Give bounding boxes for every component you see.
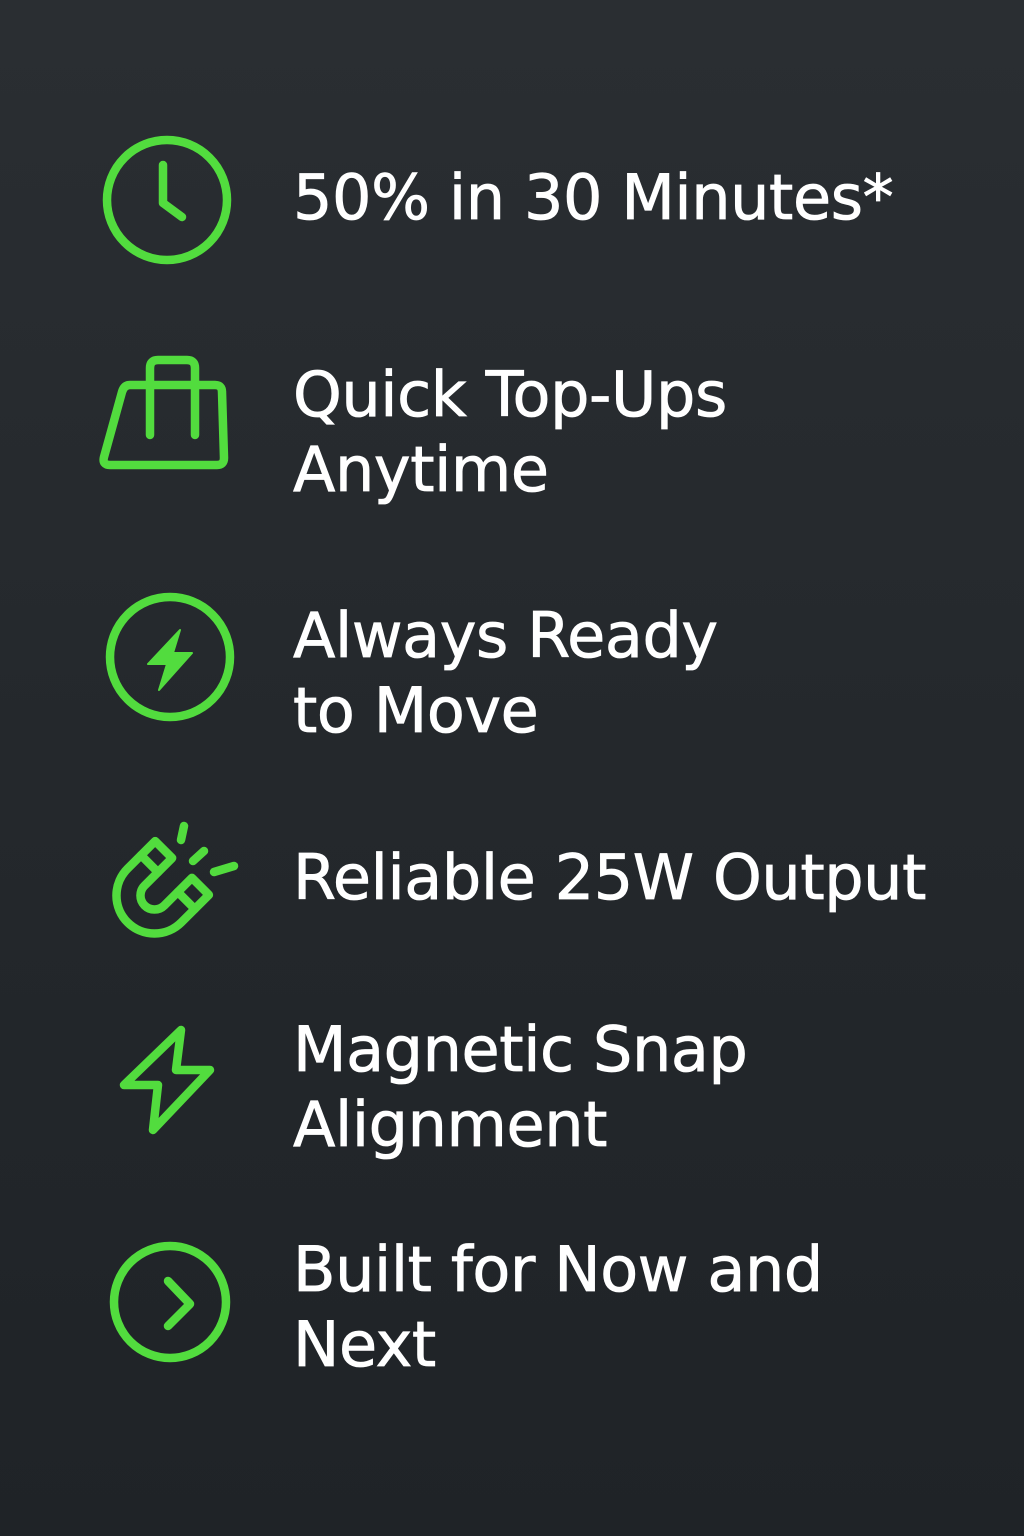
text: Always Ready to Move: Always Ready	[293, 599, 718, 672]
text: Quick Top-Ups Anytime: Quick Top-Ups	[293, 358, 727, 431]
icon: bolt in circle	[110, 597, 230, 717]
text: Magnetic Snap Alignment	[292, 1013, 747, 1161]
text: Built for Now and Next	[293, 1233, 823, 1381]
text: Reliable 25W Output: Reliable 25W Output	[293, 841, 926, 914]
text: Built for Now and Next: Next	[293, 1308, 436, 1381]
icon: clock	[107, 140, 227, 260]
text: Magnetic Snap Alignment: Alignment	[293, 1088, 607, 1161]
text: Quick Top-Ups Anytime	[292, 358, 727, 506]
icon: chevron circle	[114, 1246, 226, 1358]
icon: bag	[104, 360, 224, 465]
text: 50% in 30 Minutes: 50% in 30 Minutes*	[293, 161, 893, 234]
icon: magnet	[101, 826, 234, 949]
text: Always Ready to Move	[292, 599, 718, 747]
text: Magnetic Snap Alignment: Magnetic Snap	[293, 1013, 747, 1086]
text: Quick Top-Ups Anytime: Anytime	[293, 433, 549, 506]
icon: bolt outline	[124, 1030, 210, 1130]
text: Built for Now and Next: Built for Now and	[293, 1233, 823, 1306]
text: Always Ready to Move: to Move	[293, 674, 538, 747]
